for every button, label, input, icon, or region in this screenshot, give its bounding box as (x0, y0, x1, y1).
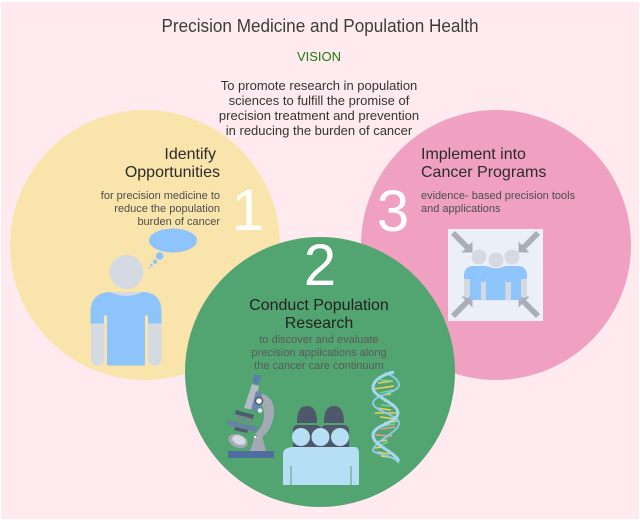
icon: thought bubble (148, 228, 197, 269)
description: identify opportunities: burden of cancer (137, 216, 220, 228)
number 1: 1 (232, 178, 264, 243)
description: identify opportunities: for precision medicine to (101, 190, 220, 202)
vision heading: VISION (297, 49, 341, 64)
number 3: 3 (377, 179, 409, 244)
icon: converging group (448, 229, 543, 321)
heading: implement into cancer programs: Implement into (421, 146, 526, 163)
arrows pointing to the group (451, 231, 540, 318)
description: conduct: the cancer care continuum (254, 360, 384, 372)
heading: conduct population research (249, 297, 389, 332)
icon: person (90, 255, 162, 366)
panel: implement into cancer programs (361, 110, 631, 380)
icon: microscope (226, 374, 274, 458)
vision statement: To promote research in population (221, 78, 417, 93)
back left person (464, 250, 487, 300)
description: conduct: to discover and evaluate (259, 334, 379, 346)
icon: research team (283, 406, 359, 485)
heading: conduct population research: Conduct Population (249, 297, 389, 314)
description: implement (421, 190, 576, 215)
vision statement: precision treatment and prevention (219, 108, 419, 123)
title: Precision Medicine and Population Health (162, 16, 478, 36)
description: implement: evidence- based precision tools (421, 190, 576, 202)
heading: conduct population research: Research (285, 315, 353, 332)
panel: identify opportunities (10, 110, 280, 380)
heading: identify opportunities: Identify (164, 146, 216, 163)
back right person (504, 250, 527, 300)
description: identify opportunities: reduce the population (114, 203, 220, 215)
icon: dna helix (373, 372, 399, 463)
panel: conduct population research (185, 233, 455, 507)
heading: implement into cancer programs (421, 146, 546, 181)
description: conduct (251, 334, 387, 372)
description: conduct: precision applications along (251, 347, 387, 359)
description: implement: and applications (421, 203, 501, 215)
number 2: 2 (304, 233, 336, 298)
vision statement (219, 78, 419, 138)
heading: implement into cancer programs: Cancer Programs (421, 164, 546, 181)
heading: identify opportunities: Opportunities (125, 164, 220, 181)
vision statement: in reducing the burden of cancer (226, 123, 413, 138)
heading: identify opportunities (125, 146, 220, 181)
description: identify opportunities (101, 190, 220, 228)
front centre person (480, 252, 511, 301)
vision statement: sciences to fulfill the promise of (229, 93, 410, 108)
